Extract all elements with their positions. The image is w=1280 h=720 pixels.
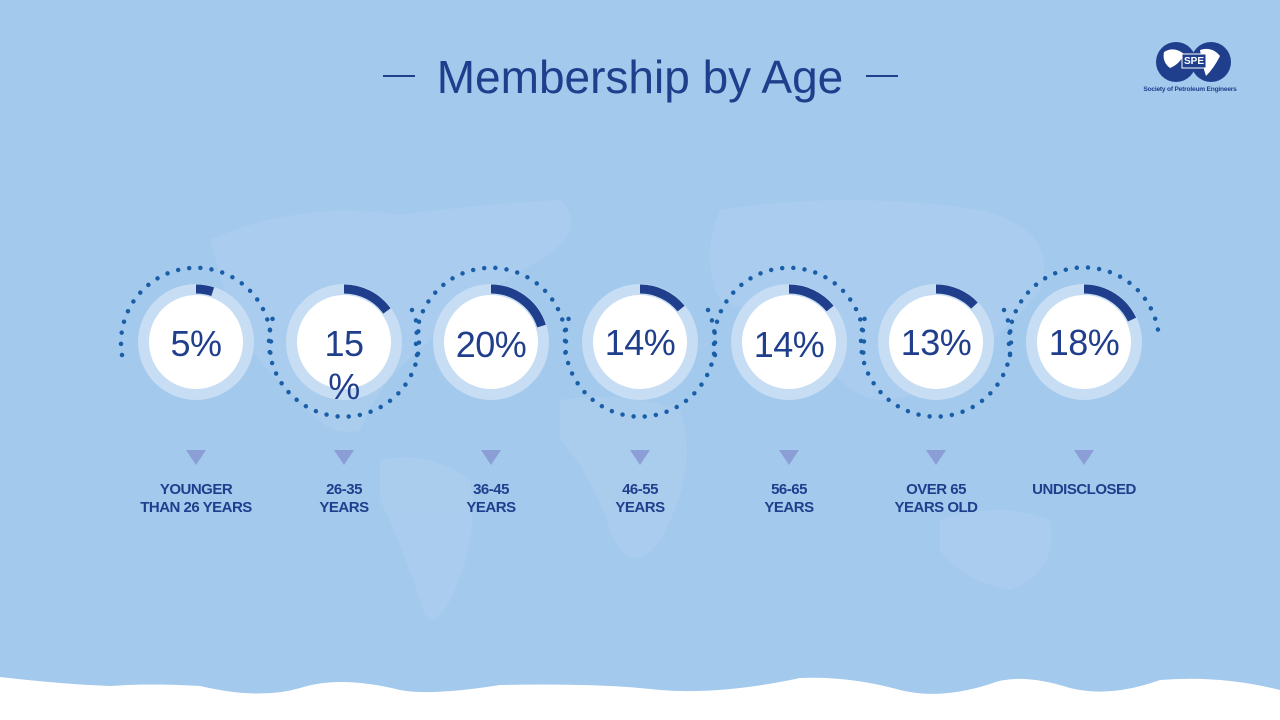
item 6: over 65 bbox=[861, 284, 1011, 516]
item 3: 36-45 bbox=[416, 268, 566, 516]
item 2: 26-35: YEARS bbox=[319, 499, 369, 516]
item 2: 26-35 bbox=[269, 284, 419, 516]
item 1: younger than 26 bbox=[121, 268, 271, 516]
item 3: 36-45: 36-45 bbox=[473, 481, 509, 498]
item 5: 56-65 bbox=[714, 268, 864, 516]
item 1: younger than 26: 5% bbox=[170, 323, 222, 364]
item 4: 46-55 bbox=[565, 284, 715, 516]
item 2: 26-35: 26-35 bbox=[326, 481, 362, 498]
item 4: 46-55: 46-55 bbox=[622, 481, 658, 498]
title: Membership by Age bbox=[437, 51, 843, 103]
item 5: 56-65: 56-65 bbox=[771, 481, 807, 498]
background world map (faint) bbox=[210, 200, 1052, 620]
item 6: over 65: 13% bbox=[901, 322, 971, 363]
item 6: over 65: OVER 65 bbox=[906, 481, 966, 498]
logo: SPE: SPE bbox=[1184, 56, 1204, 67]
item 5: 56-65: YEARS bbox=[764, 499, 814, 516]
item 2: 26-35: % bbox=[328, 366, 360, 407]
logo: SPE: Society of Petroleum Engineers bbox=[1143, 86, 1237, 93]
item 2: 26-35: 15 bbox=[324, 323, 364, 364]
item 4: 46-55: YEARS bbox=[615, 499, 665, 516]
item 6: over 65: YEARS OLD bbox=[894, 499, 978, 516]
item 1: younger than 26: YOUNGER bbox=[160, 481, 233, 498]
item 7: undisclosed: 18% bbox=[1049, 322, 1119, 363]
item 3: 36-45: YEARS bbox=[466, 499, 516, 516]
item 3: 36-45: 20% bbox=[456, 324, 526, 365]
item 5: 56-65: 14% bbox=[754, 324, 824, 365]
item 1: younger than 26: THAN 26 YEARS bbox=[140, 499, 252, 516]
bottom white wave bbox=[0, 677, 1280, 720]
item 4: 46-55: 14% bbox=[605, 322, 675, 363]
logo: SPE bbox=[1143, 42, 1237, 93]
item 7: undisclosed bbox=[1009, 267, 1158, 498]
chart: age circles bbox=[118, 265, 1160, 516]
item 7: undisclosed: UNDISCLOSED bbox=[1032, 481, 1136, 498]
